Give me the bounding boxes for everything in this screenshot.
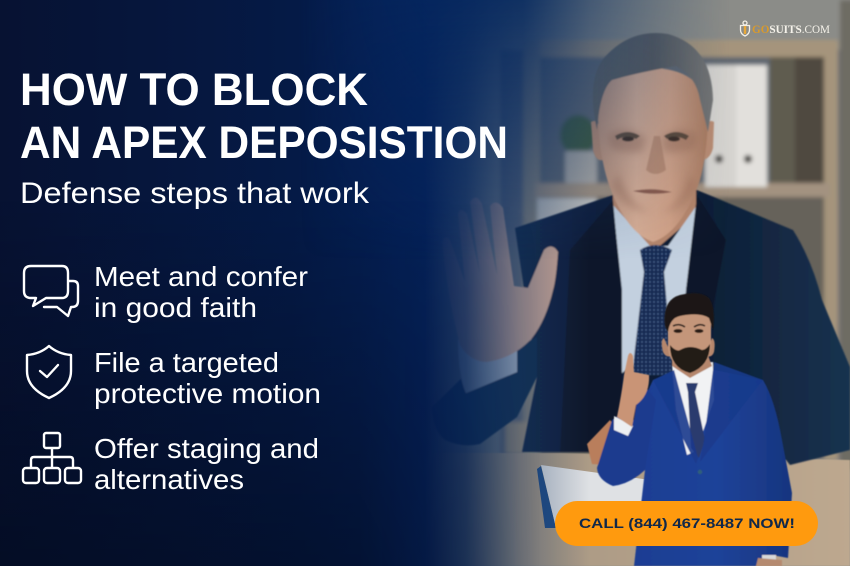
watch hand	[756, 558, 782, 566]
subtitle: Defense steps that work	[20, 177, 370, 210]
arm resting hand	[587, 420, 644, 468]
shirt collar and front	[613, 205, 697, 373]
logo text: GOSUITS.COM	[752, 24, 830, 36]
step text	[94, 261, 308, 323]
logo: GoSuits.com	[740, 21, 830, 36]
watch	[762, 555, 776, 560]
call button	[555, 501, 818, 546]
folder edge	[537, 466, 556, 528]
suit jacket	[515, 190, 850, 465]
necktie	[632, 245, 673, 375]
step 3: staging and alternatives	[23, 433, 319, 495]
table top	[0, 453, 850, 566]
line 1: Meet and confer	[94, 261, 308, 292]
line 2: alternatives	[94, 464, 244, 495]
jacket button	[698, 470, 702, 474]
lapel shadows	[653, 362, 763, 464]
document pages	[541, 465, 650, 530]
blue suit body	[625, 368, 792, 566]
top navy extension	[438, 0, 716, 236]
hair	[593, 33, 713, 132]
face	[598, 68, 708, 242]
mouth	[633, 189, 672, 194]
shirt cuff	[614, 416, 633, 436]
eyes	[674, 329, 682, 333]
line 2: protective motion	[94, 378, 321, 409]
brows and eyes	[615, 132, 689, 140]
hair	[665, 293, 714, 332]
white shirt	[672, 362, 714, 455]
button label: CALL (844) 467-8487 NOW!	[579, 515, 795, 531]
line 1: File a targeted	[94, 347, 279, 378]
line 1: Offer staging and	[94, 433, 319, 464]
step text	[94, 347, 321, 409]
executive with raised hand	[432, 33, 850, 465]
lapels	[560, 195, 726, 452]
face	[668, 305, 711, 372]
icon: shield with check	[27, 346, 71, 398]
title line 1: HOW TO BLOCK	[20, 64, 368, 115]
title	[20, 64, 508, 168]
neck	[613, 190, 696, 250]
step text	[94, 433, 319, 495]
attorney in blue suit	[587, 293, 792, 566]
shirt cuff	[458, 340, 517, 393]
eye socket shading	[608, 130, 698, 212]
raised sleeve	[597, 380, 656, 486]
bottom shading	[0, 302, 511, 566]
ears	[591, 121, 714, 160]
button shape	[555, 501, 818, 546]
raised hand with finger	[617, 353, 649, 427]
line 2: in good faith	[94, 292, 257, 323]
icon: lock	[740, 21, 750, 36]
tie	[686, 383, 705, 458]
beard	[670, 344, 710, 373]
nose shadow	[646, 136, 666, 174]
step 1: meet and confer	[24, 261, 308, 323]
icon: org chart	[23, 433, 81, 483]
neck and ears	[662, 338, 715, 378]
table with documents	[0, 453, 850, 566]
step 2: protective motion	[27, 346, 321, 409]
title line 2: AN APEX DEPOSISTION	[20, 117, 508, 168]
hand and fingers	[442, 197, 558, 362]
left sleeve	[432, 337, 537, 445]
icon: chat bubbles	[24, 266, 78, 316]
